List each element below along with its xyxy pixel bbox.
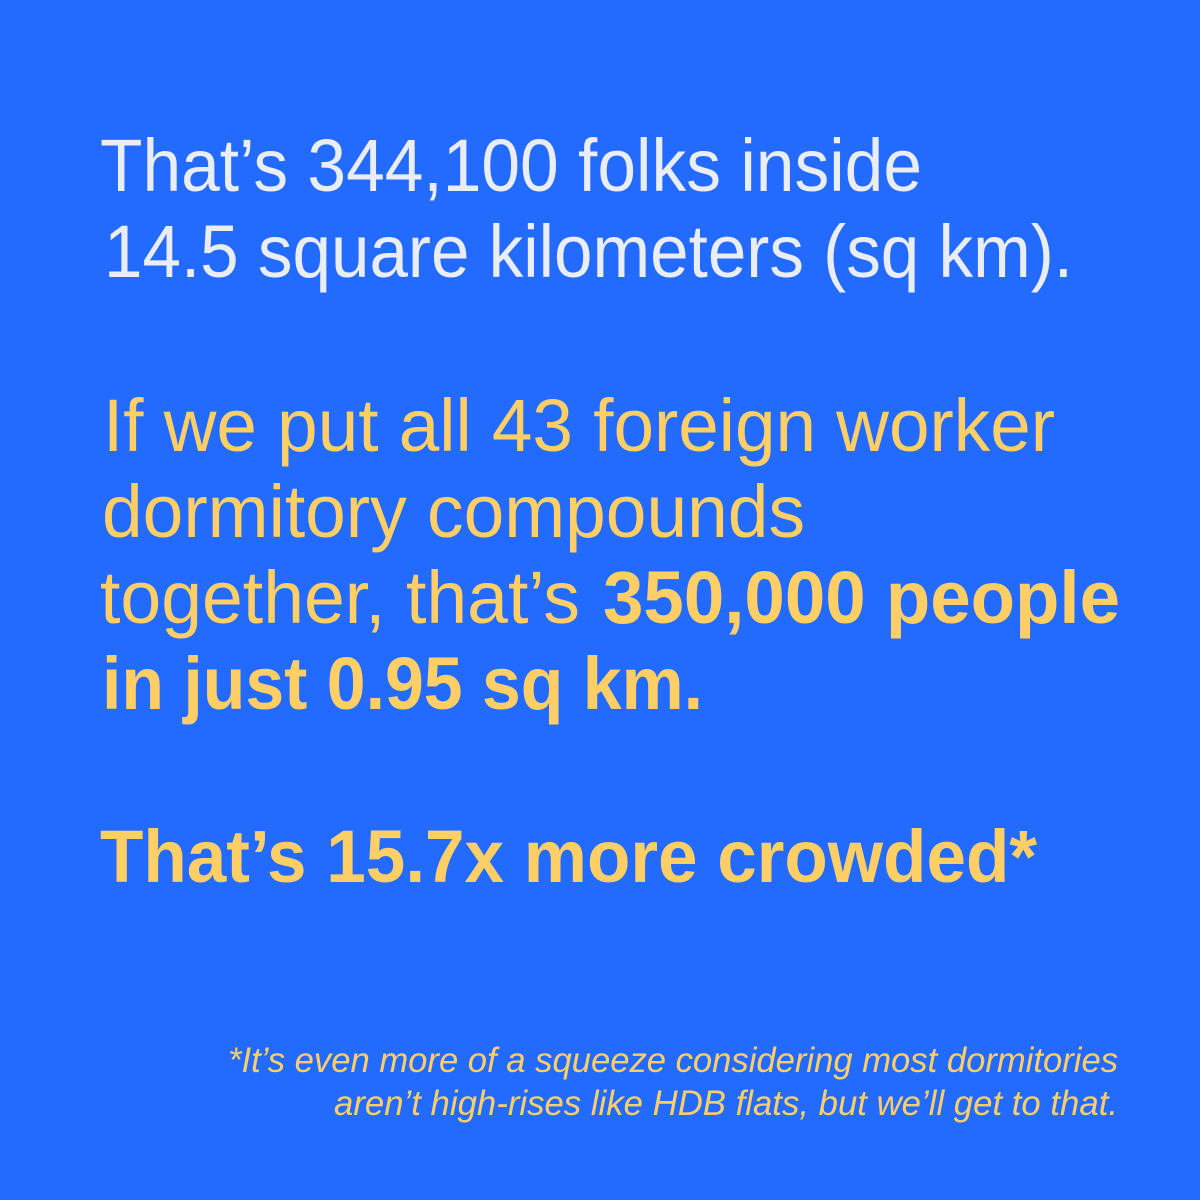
text block: dormitory comparison: together, that’s [100, 556, 580, 639]
text block: dormitory comparison: dormitory compounds [102, 470, 805, 553]
text block: dormitory comparison: in just 0.95 sq km. [102, 642, 703, 725]
text block: dormitory comparison [100, 384, 1120, 725]
text block: dormitory comparison: 350,000 people [603, 556, 1120, 639]
footnote: aren’t high-rises like HDB flats, but we’ll get to that. [334, 1084, 1118, 1123]
footnote: *It’s even more of a squeeze considering most dormitories [228, 1041, 1118, 1080]
text block: Singapore comparison: 14.5 square kilometers (sq km). [104, 210, 1073, 293]
text block: dormitory comparison: If we put all 43 foreign worker [103, 384, 1055, 467]
heading: crowding callout: That’s 15.7x more crowded* [100, 815, 1037, 898]
text block: Singapore comparison: That’s 344,100 folks inside [100, 124, 922, 207]
footnote [228, 1041, 1118, 1123]
text block: Singapore comparison [100, 124, 1073, 293]
